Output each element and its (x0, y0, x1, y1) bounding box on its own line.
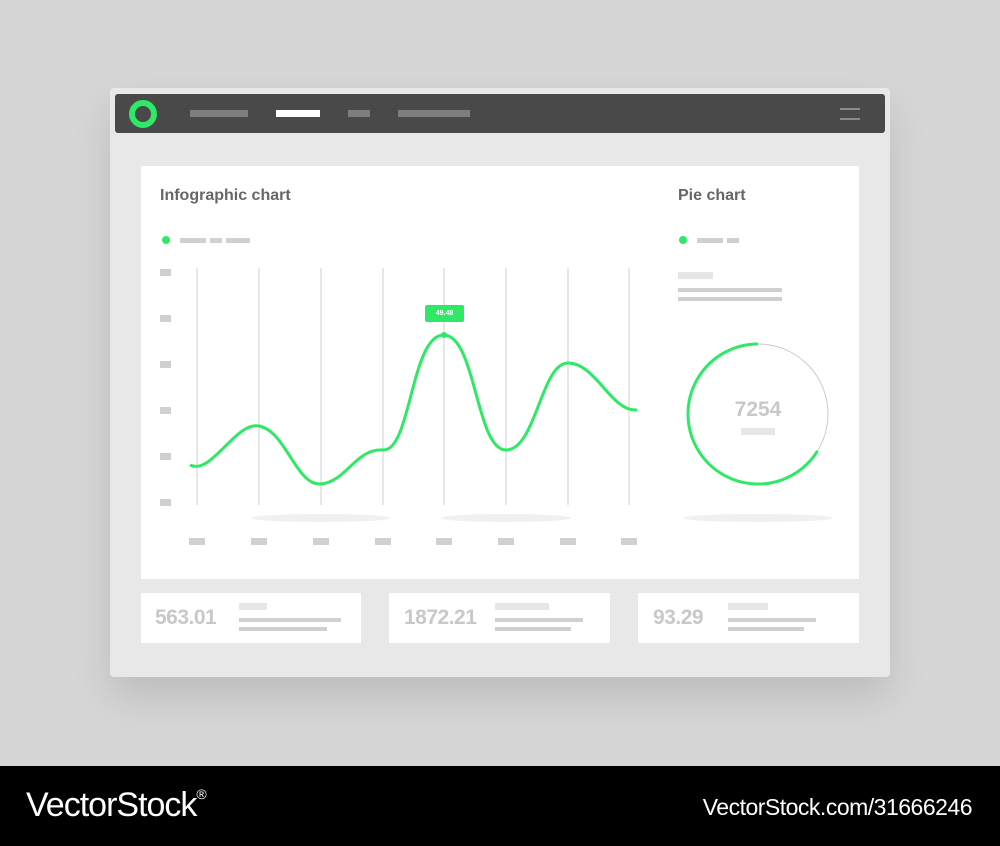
line chart (160, 268, 832, 545)
card: 563.01 (141, 593, 361, 643)
card: 93.29 (638, 593, 859, 643)
donut label bar (741, 428, 775, 435)
footer url: VectorStock.com/31666246 (703, 794, 972, 820)
card: 563.01: 563.01 (155, 606, 216, 629)
footer band (0, 766, 1000, 846)
card: 1872.21: 1872.21 (404, 606, 476, 629)
callout: 49.48 (425, 305, 464, 322)
icon: menu (840, 108, 860, 120)
heading: infographic chart: Infographic chart (160, 187, 291, 204)
callout: 49.48: 49.48 (436, 310, 453, 317)
donut chart (686, 342, 828, 486)
panel: main chart (141, 166, 859, 579)
footer brand: VectorStock® (26, 786, 206, 824)
window (110, 88, 890, 677)
legend (162, 236, 250, 244)
card: 93.29: 93.29 (653, 606, 703, 629)
pie legend (679, 236, 739, 244)
pie text block (678, 272, 782, 301)
nav items (190, 110, 470, 117)
icon: logo ring (129, 100, 157, 128)
heading: pie chart: Pie chart (678, 187, 746, 204)
header bar (115, 94, 885, 133)
card: 1872.21 (389, 593, 610, 643)
donut value: 7254 (735, 398, 781, 421)
